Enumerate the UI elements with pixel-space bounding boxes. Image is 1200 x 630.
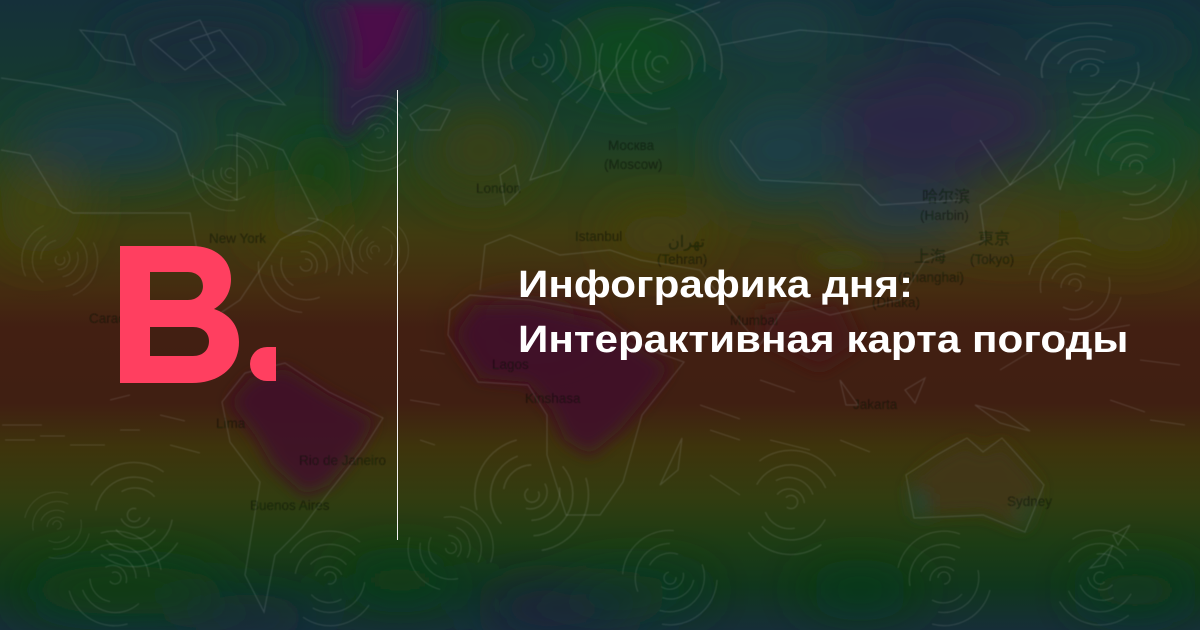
title xyxy=(518,264,1128,361)
map labels: Caracas xyxy=(89,311,140,326)
map labels: Istanbul xyxy=(575,229,622,244)
map labels: Jakarta xyxy=(853,397,898,412)
map labels: Rio de Janeiro xyxy=(299,453,386,468)
map labels: (Dhaka) xyxy=(872,295,920,310)
map labels: تهران xyxy=(668,234,705,251)
title: Инфографика дня: xyxy=(518,264,913,306)
vertical divider xyxy=(397,90,398,540)
icon: Greenland magenta area xyxy=(310,0,432,143)
map labels: (Harbin) xyxy=(920,208,969,223)
map labels: (Tehran) xyxy=(657,252,707,267)
map labels: 哈尔滨 xyxy=(922,188,970,206)
map labels: Mumbai xyxy=(730,313,778,328)
map labels: New York xyxy=(209,231,266,246)
map labels: Москва xyxy=(608,138,655,153)
map labels: (Shanghai) xyxy=(898,270,964,285)
map labels: (Tokyo) xyxy=(970,252,1014,267)
map labels: London xyxy=(476,181,521,196)
map labels: Sydney xyxy=(1007,494,1052,509)
map labels: Kinshasa xyxy=(525,391,581,406)
map labels: (Moscow) xyxy=(604,157,663,172)
map labels: Buenos Aires xyxy=(250,498,330,513)
map labels: 上海 xyxy=(914,248,946,266)
map labels: 東京 xyxy=(978,230,1010,248)
title: Интерактивная карта погоды xyxy=(518,319,1128,361)
map labels xyxy=(89,138,1052,513)
map: continents xyxy=(230,250,1040,530)
map labels: Lagos xyxy=(492,357,529,372)
map labels: Lima xyxy=(216,416,246,431)
